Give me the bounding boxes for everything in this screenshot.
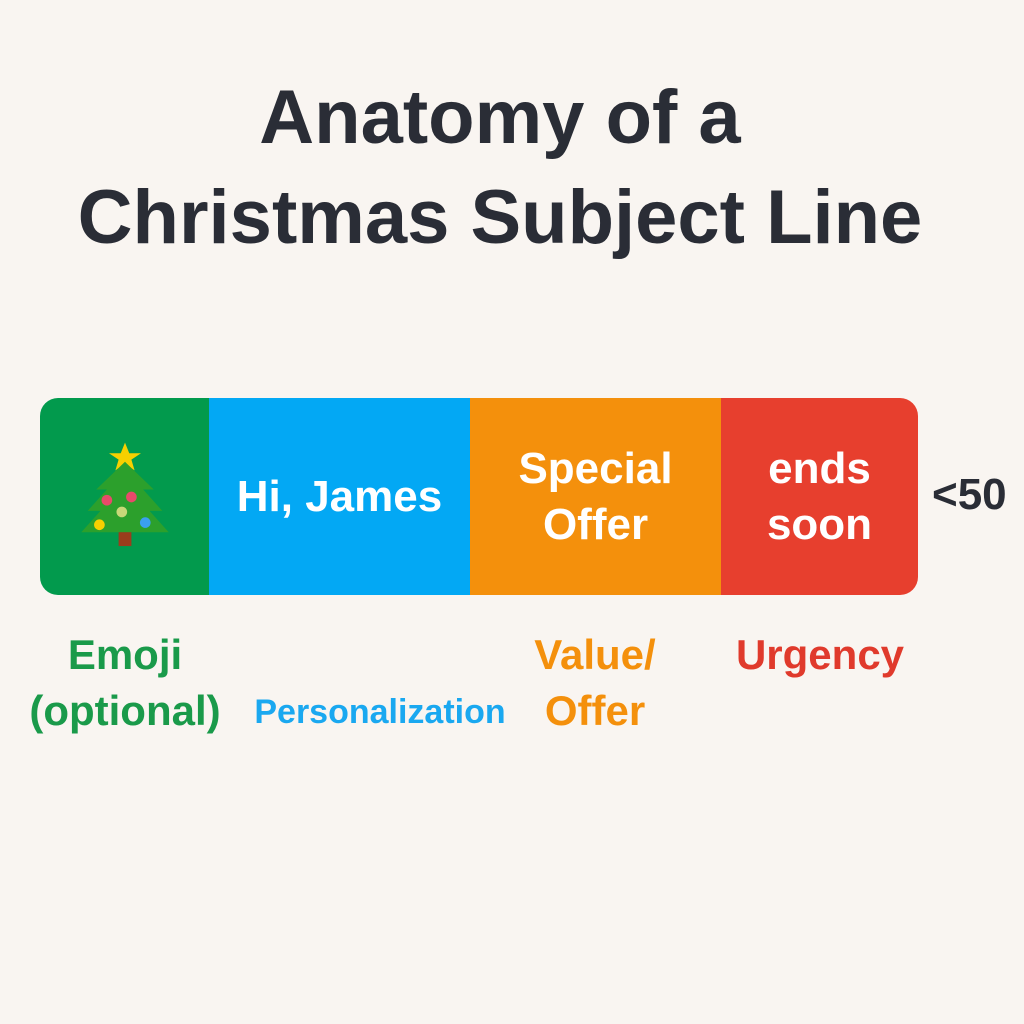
segment: personalization: Hi, James: [237, 472, 442, 520]
label: emoji: [29, 631, 221, 734]
title: [78, 75, 922, 260]
label: emoji: Emoji: [68, 631, 182, 678]
subject line bar: [40, 398, 918, 595]
segment: emoji: [40, 398, 209, 595]
title: Anatomy of a: [259, 75, 741, 160]
label: urgency: Urgency: [736, 631, 904, 678]
segment: urgency: [721, 398, 918, 595]
segment: personalization: [209, 398, 470, 595]
title: Christmas Subject Line: [78, 175, 922, 260]
segment: urgency: soon: [767, 500, 872, 548]
label: value offer: Value/: [534, 631, 656, 678]
icon: christmas tree: [82, 442, 168, 546]
label: value offer: Offer: [545, 687, 645, 734]
segment: value offer: Offer: [543, 500, 648, 548]
label: emoji: (optional): [29, 687, 221, 734]
label: value offer: [534, 631, 656, 734]
segment: urgency: ends: [768, 444, 871, 492]
segment: value offer: [470, 398, 721, 595]
character count: <50: [932, 470, 1007, 519]
segment: value offer: Special: [518, 444, 673, 492]
label: personalization: Personalization: [254, 693, 506, 731]
